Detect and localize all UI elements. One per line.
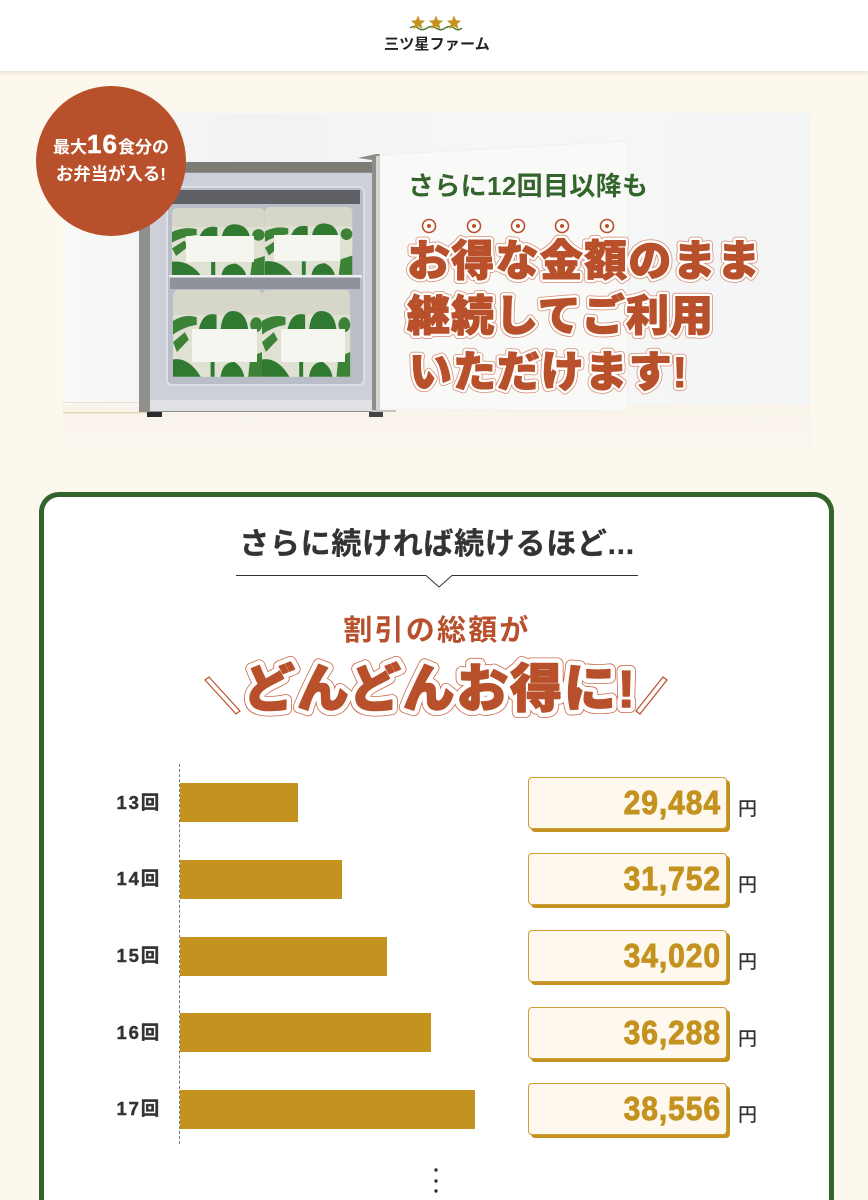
hero headline text: 継続してご利用 xyxy=(407,292,713,341)
heading divider with notch xyxy=(236,575,638,588)
panel heading: さらに続ければ続けるほど... xyxy=(239,528,635,561)
text: 円 xyxy=(738,1105,757,1126)
big heading text: どんどんお得に! xyxy=(243,661,635,719)
value 15 xyxy=(528,930,727,982)
hero sub heading: さらに12回目以降も xyxy=(408,171,648,201)
hero headline xyxy=(404,171,760,397)
text: 16回 xyxy=(117,1022,161,1043)
text: 円 xyxy=(738,875,757,896)
header bar xyxy=(0,0,868,71)
axis line xyxy=(179,764,180,1144)
hero headline text: いただけます! xyxy=(409,349,687,397)
logo text: 三ツ星ファーム xyxy=(384,36,490,53)
value 16: 36,288 xyxy=(624,1014,721,1051)
hero headline text: いただけます! xyxy=(409,349,687,397)
hero headline text: 継続してご利用 xyxy=(407,292,713,341)
hero photo: freezer with meal packs xyxy=(63,113,811,417)
emphasis dots xyxy=(422,220,614,232)
badge: up to 16 meals xyxy=(36,86,186,236)
value 14: 31,752 xyxy=(624,860,721,897)
hero headline text: お得な金額のまま xyxy=(407,238,760,286)
badge line 2: お弁当が入る! xyxy=(56,164,166,184)
continuation dots xyxy=(434,1168,438,1193)
hero headline text: お得な金額のまま xyxy=(407,238,760,286)
row labels: 13回 xyxy=(117,792,161,813)
hero headline text: 継続してご利用 xyxy=(407,292,713,341)
yen units: 円 xyxy=(738,799,757,820)
hero headline text xyxy=(407,238,760,397)
icon: three stars over green waves xyxy=(410,16,462,30)
logo xyxy=(384,16,490,53)
panel: discount chart xyxy=(39,492,834,1200)
value 13 xyxy=(528,777,727,829)
text: 15回 xyxy=(117,945,161,966)
text: 円 xyxy=(738,952,757,973)
hero headline text: お得な金額のまま xyxy=(407,238,760,286)
text: 円 xyxy=(738,1029,757,1050)
right slash xyxy=(636,677,667,714)
value 16 xyxy=(528,1007,727,1059)
bar chart xyxy=(179,764,180,1144)
value 17 xyxy=(528,1083,727,1135)
left slash xyxy=(205,677,240,714)
value 14 xyxy=(528,853,727,905)
meal packs lower row xyxy=(173,290,350,377)
open freezer door xyxy=(358,141,628,412)
text: 14回 xyxy=(117,868,161,889)
sub heading: 割引の総額が xyxy=(343,615,531,647)
big heading with slashes xyxy=(204,656,668,719)
text: 17回 xyxy=(117,1098,161,1119)
value 17: 38,556 xyxy=(624,1090,721,1127)
freezer body xyxy=(139,162,383,417)
meal packs upper row xyxy=(169,207,362,278)
bars xyxy=(180,783,298,822)
value 15: 34,020 xyxy=(624,937,721,974)
value 13: 29,484 xyxy=(624,784,721,821)
big heading text: どんどんお得に! xyxy=(243,661,635,719)
badge line 1: 最大16食分の xyxy=(53,129,169,159)
big heading text: どんどんお得に! xyxy=(243,661,635,719)
hero headline text: いただけます! xyxy=(409,349,687,397)
